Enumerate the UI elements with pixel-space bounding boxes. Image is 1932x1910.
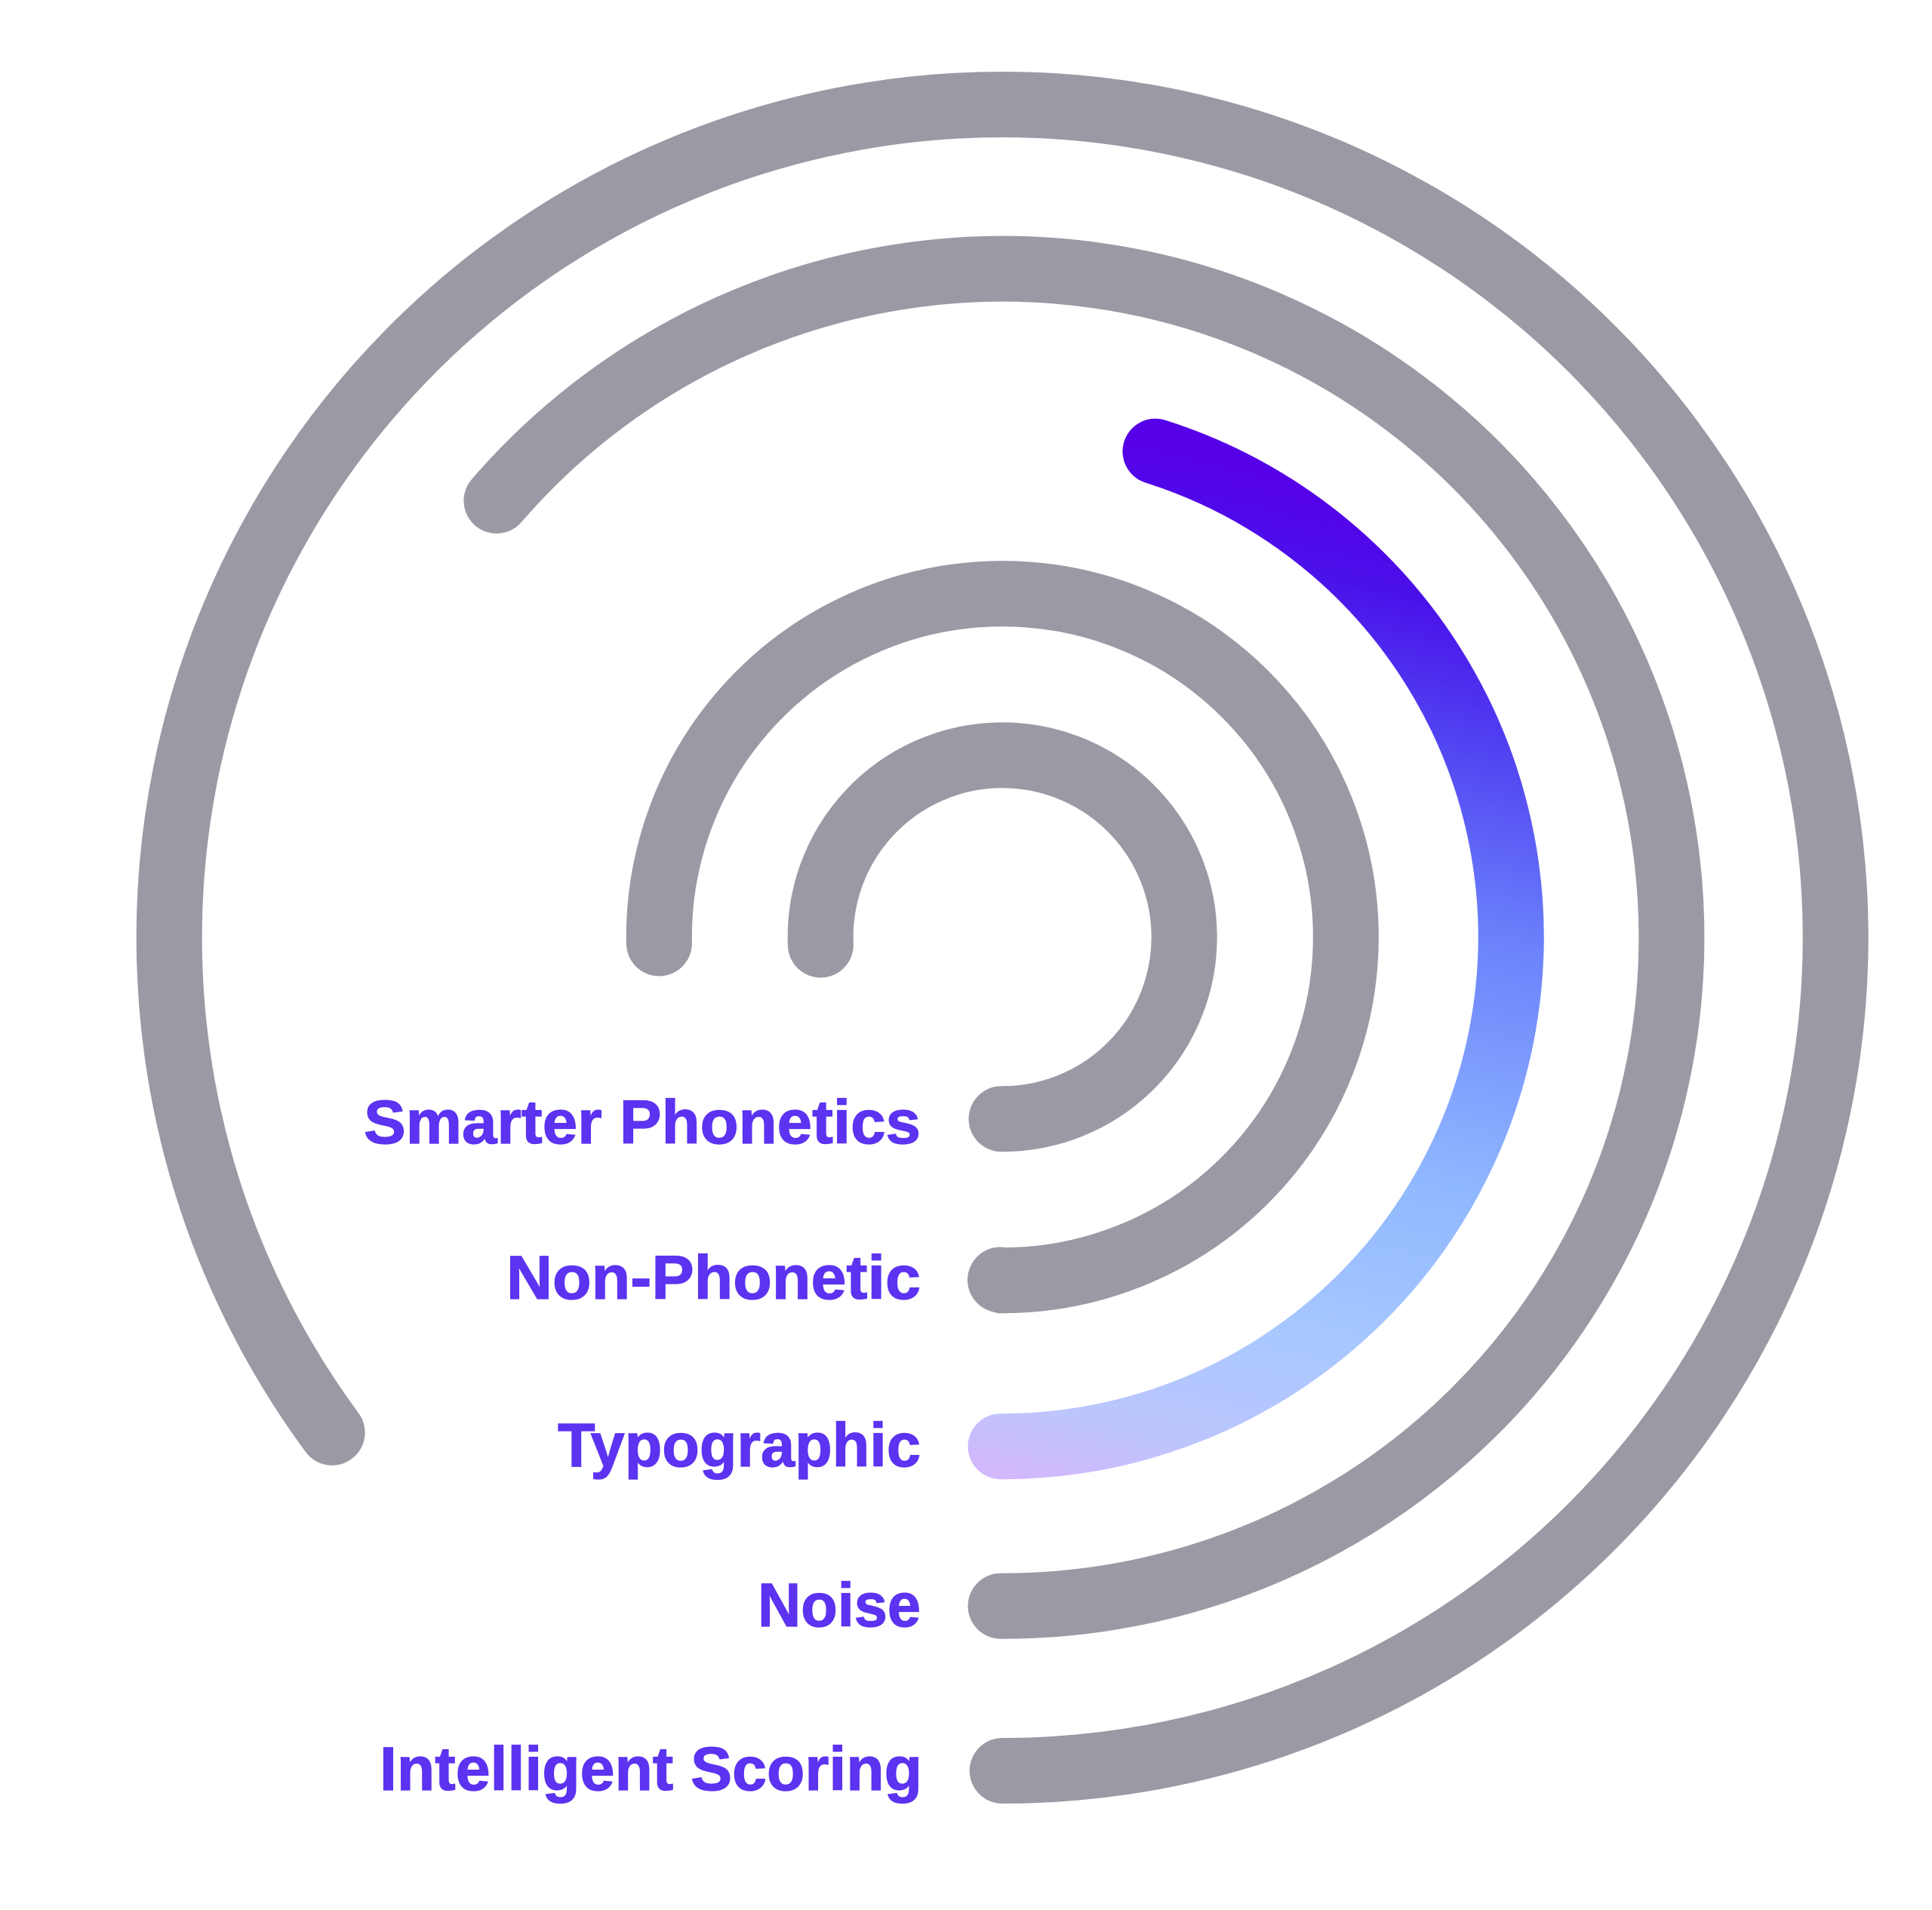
arc: Noise <box>497 269 1672 1606</box>
label: Typographic: Typographic <box>558 1411 921 1480</box>
arc: Intelligent Scoring <box>169 105 1835 1771</box>
label: Noise: Noise <box>758 1571 921 1640</box>
label: Smarter Phonetics: Smarter Phonetics <box>364 1088 921 1157</box>
label: Intelligent Scoring: Intelligent Scoring <box>380 1735 922 1804</box>
label: Non-Phonetic: Non-Phonetic <box>506 1244 921 1312</box>
arc: Smarter Phonetics <box>820 755 1184 1119</box>
arc: Typographic <box>1001 451 1511 1447</box>
arc: Non-Phonetic <box>659 594 1346 1281</box>
